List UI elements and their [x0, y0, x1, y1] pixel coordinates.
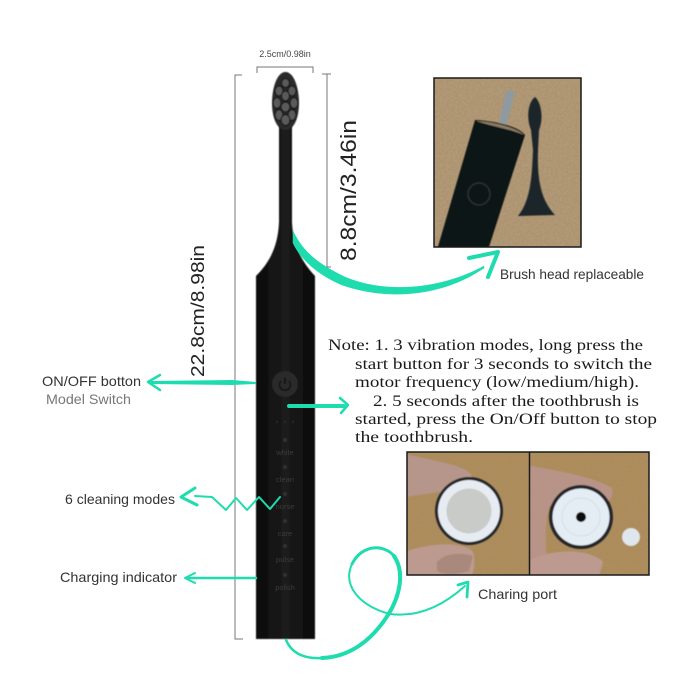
mode indicator lights and labels: white [275, 448, 294, 457]
label: model switch: Model Switch [46, 391, 131, 407]
arrow: charging indicator [185, 573, 256, 583]
dimension: head length [322, 74, 361, 267]
photo: replaceable brush head [434, 78, 581, 250]
arrow: on/off button [148, 375, 256, 390]
brush head [272, 72, 299, 130]
note text: 2. 5 seconds after the toothbrush is [373, 393, 639, 410]
right photo: open base with port [527, 465, 640, 580]
note text: Note: 1. 3 vibration modes, long press the [328, 337, 643, 354]
arrow: brush head [293, 231, 498, 294]
mode indicator lights and labels [275, 421, 295, 592]
mode indicator lights and labels: nurse [276, 502, 294, 511]
mode indicator lights and labels: pulse [276, 555, 294, 564]
label: brush head: Brush head replaceable [500, 266, 644, 282]
toothbrush [256, 72, 315, 639]
mode indicator lights and labels: polish [275, 583, 295, 592]
dimension: head width [257, 49, 313, 73]
label: charging indicator: Charging indicator [60, 569, 177, 585]
infographic canvas [42, 50, 656, 660]
arrow: charging port loop [286, 548, 468, 658]
toothbrush handle and neck [256, 125, 315, 639]
labels [42, 266, 644, 602]
dimension: head length: 8.8cm/3.46in [336, 120, 361, 261]
photo: charging port [405, 452, 649, 580]
label: cleaning modes: 6 cleaning modes [65, 491, 175, 507]
note text: start button for 3 seconds to switch the [355, 356, 652, 373]
label: charging port: Charing port [478, 586, 557, 602]
photo frames [407, 452, 649, 575]
dimension: total height [188, 75, 243, 639]
left photo: base cap [405, 454, 503, 580]
dimension: total height: 22.8cm/8.98in [188, 245, 208, 377]
handle in photo [437, 120, 525, 250]
metal shaft [498, 90, 515, 131]
label: on/off button: ON/OFF botton [42, 373, 141, 389]
collar highlight [257, 277, 314, 279]
arrow: cleaning modes [181, 488, 280, 510]
arrow: note [289, 398, 348, 413]
dimension: head width: 2.5cm/0.98in [259, 49, 311, 59]
note text: started, press the On/Off button to stop [355, 411, 657, 428]
mode indicator lights and labels: care [278, 529, 292, 538]
note text [328, 337, 657, 446]
note text: motor frequency (low/medium/high). [355, 374, 639, 391]
power button [272, 371, 298, 397]
mode indicator lights and labels: clean [276, 475, 294, 484]
note text: the toothbrush. [355, 429, 473, 446]
detached brush head [518, 97, 555, 216]
